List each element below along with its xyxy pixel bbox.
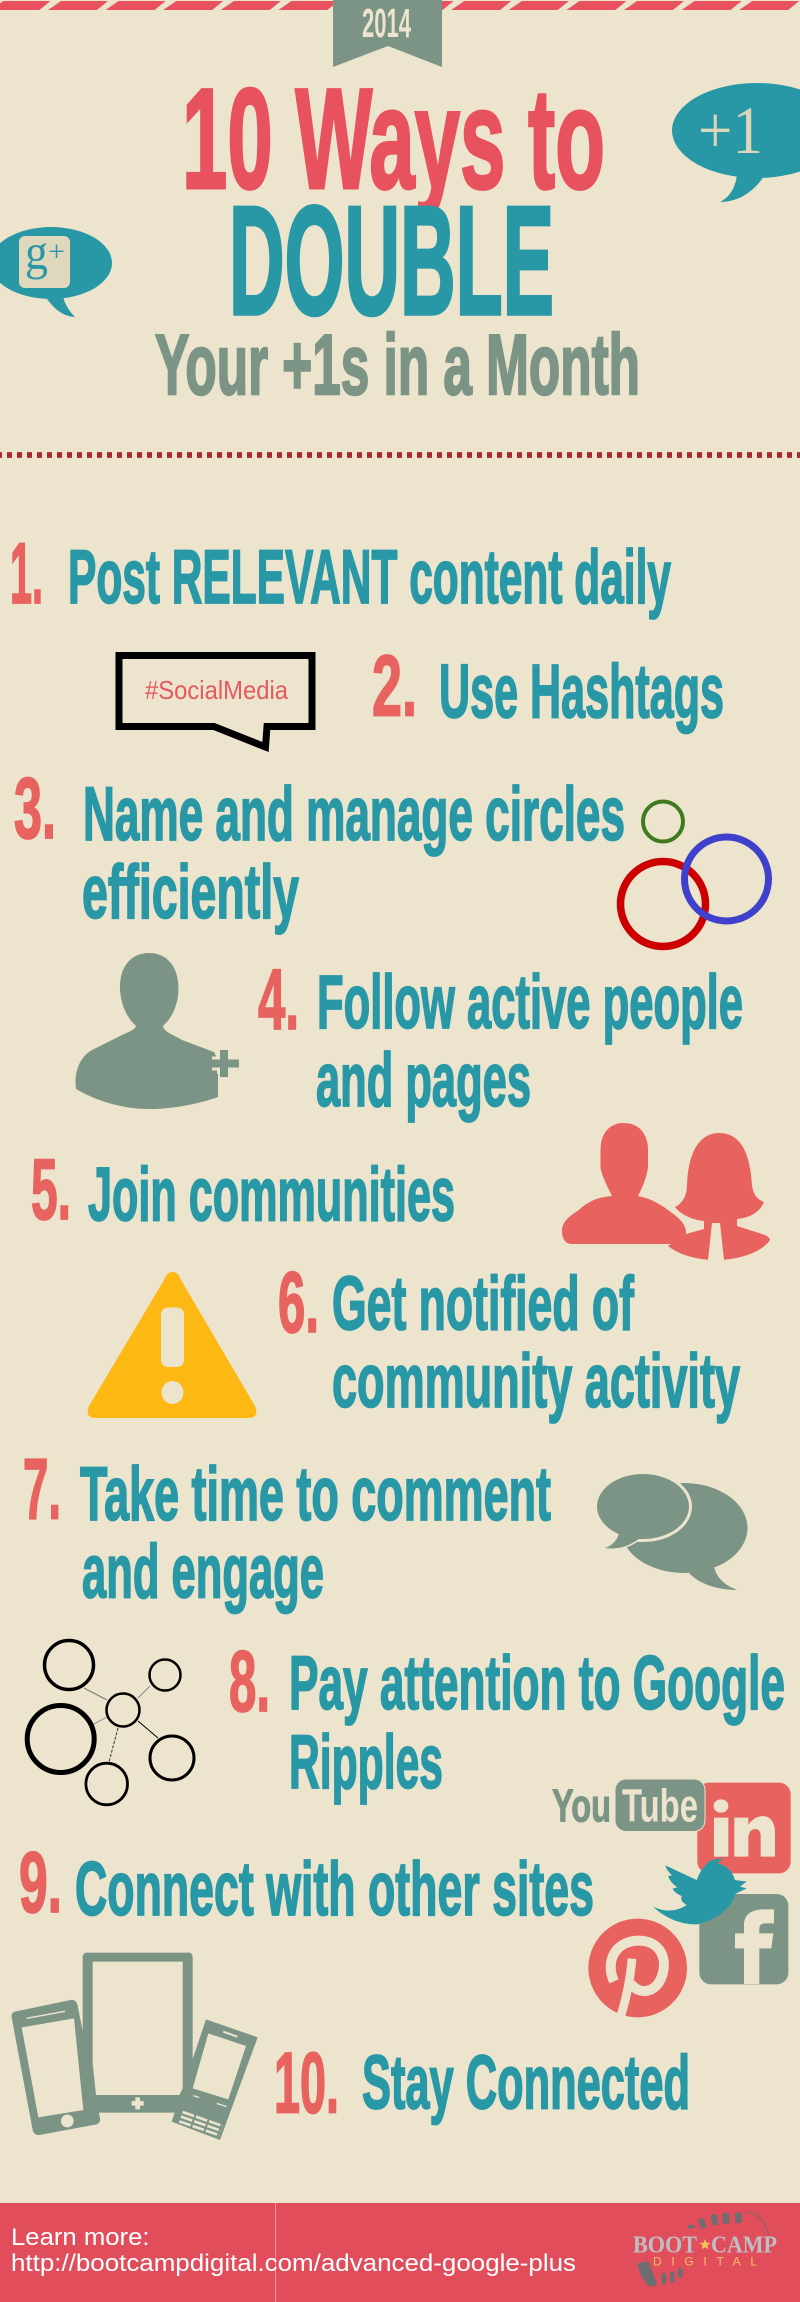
icon: g+ speech bubble <box>0 224 112 317</box>
logo: Boot Camp Digital <box>633 2212 777 2287</box>
icon: pinterest <box>588 1919 687 2017</box>
icon: #SocialMedia speech box <box>119 656 312 747</box>
footer text: http://bootcampdigital.com/advanced-google-plus <box>11 2250 576 2277</box>
item 1 <box>10 526 671 622</box>
footer text <box>11 2224 576 2277</box>
item 8: Ripples <box>289 1720 443 1805</box>
icon: person with plus <box>76 953 239 1109</box>
item 8 <box>229 1634 785 1805</box>
item 4: and pages <box>316 1038 531 1123</box>
item 8: 8. <box>229 1634 270 1730</box>
item 2 <box>372 638 724 734</box>
item 6 <box>278 1255 740 1424</box>
footer text: Learn more: <box>11 2224 150 2251</box>
icon: facebook <box>699 1894 788 1984</box>
logo: Boot Camp Digital: DIGITAL <box>653 2255 757 2269</box>
icon: youtube <box>552 1779 705 1832</box>
icon: +1 speech bubble: +1 <box>698 92 763 168</box>
item 5 <box>31 1142 455 1238</box>
icon: g+ speech bubble: g <box>25 224 48 280</box>
icon: #SocialMedia speech box: #SocialMedia <box>145 675 288 705</box>
item 7: 7. <box>23 1442 61 1538</box>
icon: circles <box>620 802 768 946</box>
icon: two people <box>562 1123 770 1260</box>
title <box>155 60 640 413</box>
item 10: 10. <box>274 2036 339 2132</box>
left phone <box>12 2000 100 2135</box>
icon: warning triangle <box>88 1272 256 1418</box>
item 3: 3. <box>14 761 56 857</box>
ribbon: 2014: 2014 <box>362 0 411 46</box>
icon: g+ speech bubble: + <box>48 237 65 268</box>
logo: Boot Camp Digital: CAMP <box>711 2233 777 2259</box>
item 3: efficiently <box>82 850 299 935</box>
item 1: 1. <box>10 526 43 622</box>
logo: Boot Camp Digital: BOOT <box>633 2233 697 2259</box>
tablet <box>83 1953 193 2113</box>
icon: twitter <box>652 1858 747 1924</box>
item 4: 4. <box>258 952 299 1048</box>
icon: devices <box>12 1953 258 2140</box>
icon: +1 speech bubble <box>672 83 800 202</box>
icon: linkedin <box>697 1783 791 1873</box>
ribbon: 2014 <box>333 0 442 67</box>
footer panel <box>0 2203 800 2302</box>
item 9: 9. <box>19 1835 62 1931</box>
icon: youtube: Tube <box>622 1780 698 1832</box>
item 9 <box>19 1835 594 1932</box>
icons: social networks <box>552 1779 791 2017</box>
right phone <box>172 2019 258 2140</box>
icon: network of circles <box>27 1640 194 1805</box>
item 7 <box>23 1442 551 1614</box>
item 7: and engage <box>82 1530 324 1614</box>
item 3 <box>14 761 625 935</box>
item 4 <box>258 952 743 1123</box>
item 10 <box>274 2036 690 2132</box>
item 6: 6. <box>278 1255 319 1351</box>
icon: chat bubbles <box>597 1474 748 1590</box>
item 2: 2. <box>372 638 417 734</box>
item 5: Join communities <box>88 1152 455 1238</box>
item 5: 5. <box>31 1142 71 1238</box>
icon: youtube: You <box>552 1780 611 1832</box>
